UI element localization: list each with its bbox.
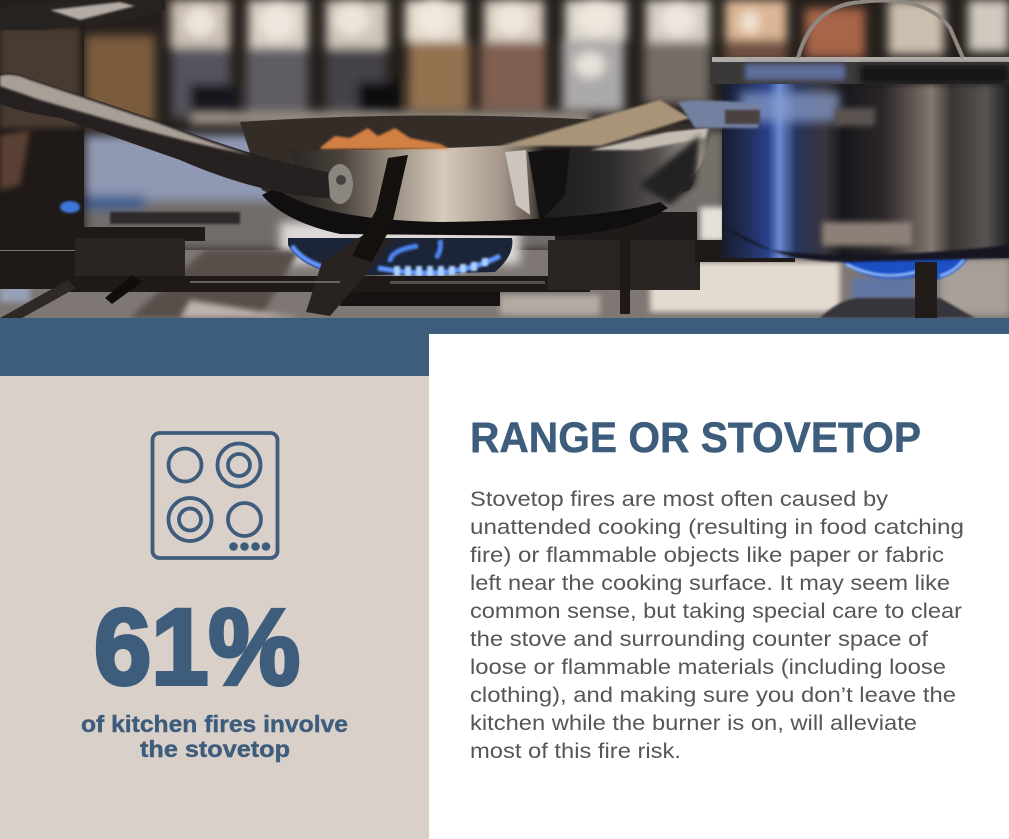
frying pan with food [240,100,712,262]
body text: left near the cooking surface. It may seem like [470,571,950,595]
body text: Stovetop fires are most often caused by [470,487,888,511]
panel: white text area [429,334,1009,839]
statistic caption [81,711,348,762]
body text [470,487,964,763]
stovetop surface and glow [0,207,1009,318]
photo: pans on a lit gas stove [0,0,1009,318]
body text: clothing), and making sure you don’t leave the [470,683,956,707]
body text: kitchen while the burner is on, will alleviate [470,711,917,735]
blurred back wall behind pan [85,112,725,250]
statistic caption: of kitchen fires involve [81,711,348,737]
body text: common sense, but taking special care to clear [470,599,962,623]
bright jar highlights [184,0,760,79]
gas flame under right pot [820,256,975,318]
cast iron grates [0,212,937,318]
body text: fire) or flammable objects like paper or fabric [470,543,944,567]
statistic caption: the stovetop [140,736,290,762]
body text: the stove and surrounding counter space of [470,627,928,651]
heading: RANGE OR STOVETOP [470,414,921,462]
icon: stovetop with four burners [152,433,278,558]
statistic: 61 percent: 61% [94,586,300,707]
blue band under photo [0,318,1009,334]
panel: beige statistic [0,376,429,839]
body text: most of this fire risk. [470,739,681,763]
gas flame under pan [288,238,512,306]
body text: loose or flammable materials (including loose [470,655,946,679]
pan handle [0,73,330,198]
panel: statistic background [0,334,429,376]
right stock pot with lid [678,0,1009,262]
left pot [0,0,165,250]
body text: unattended cooking (resulting in food catching [470,515,964,539]
blurred spice jars background [85,0,1009,125]
